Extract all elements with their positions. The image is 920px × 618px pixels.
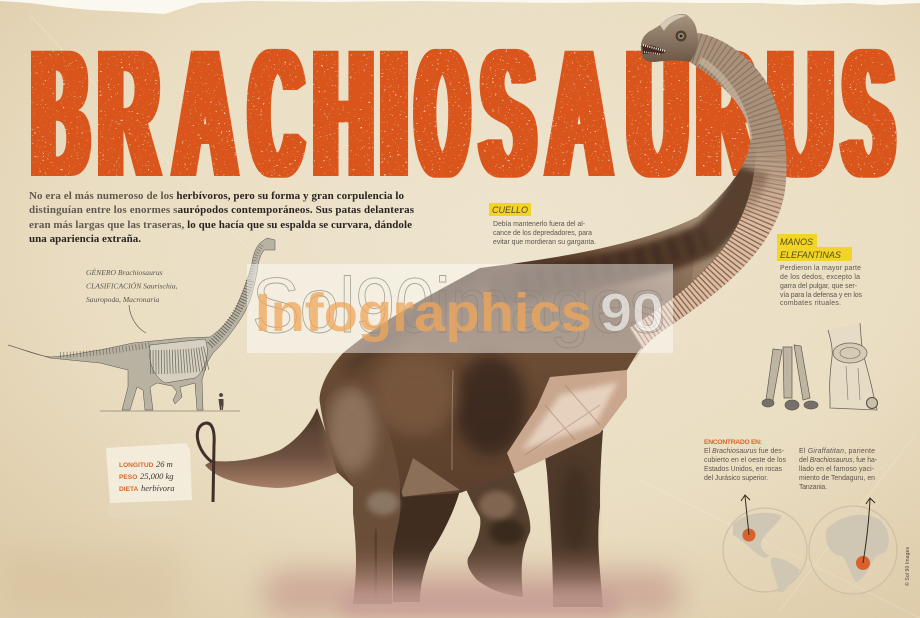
callout: cuello: Debía mantenerlo fuera del al- bbox=[493, 221, 585, 228]
callout: manos elefantinas: combates rituales. bbox=[780, 300, 841, 307]
data card: DIETA bbox=[119, 486, 139, 493]
location marker bbox=[742, 528, 756, 542]
text: encontrado en: cubierto en el oeste de los bbox=[704, 457, 787, 464]
text: giraffatitan: del Brachiosaurus, fue ha- bbox=[799, 457, 877, 464]
neck bbox=[400, 32, 786, 400]
title: A bbox=[548, 12, 610, 216]
title bbox=[33, 11, 893, 216]
text: giraffatitan: El Giraffatitan, pariente bbox=[799, 448, 875, 455]
data card: 26 m bbox=[156, 459, 173, 469]
text: encontrado en: Estados Unidos, en rocas bbox=[704, 466, 783, 473]
title: U bbox=[769, 12, 833, 215]
title: R bbox=[698, 11, 755, 215]
text: encontrado en: del Jurásico superior. bbox=[704, 475, 768, 482]
shoulder plate bbox=[507, 370, 627, 473]
text: giraffatitan: llado en el famoso yaci- bbox=[799, 466, 874, 473]
intro text: una apariencia extraña. bbox=[29, 233, 141, 245]
callout: cuello bbox=[489, 203, 596, 246]
text: encontrado en bbox=[704, 439, 787, 482]
far hind leg bbox=[393, 485, 460, 602]
sketch taxonomy note bbox=[86, 267, 178, 333]
callout: manos elefantinas: de los dedos, excepto la bbox=[780, 274, 860, 281]
main illustration: brachiosaurus bbox=[197, 32, 786, 607]
torso bbox=[320, 217, 697, 497]
intro text: distinguían entre los enormes saurópodos contemporáneos. Sus patas delanteras bbox=[29, 204, 415, 216]
credit: © Sol 90 Images bbox=[904, 546, 911, 586]
title: H bbox=[315, 11, 372, 215]
watermark: Sol90images bbox=[252, 261, 665, 349]
sketch taxonomy note: Sauropoda, Macronaria bbox=[86, 295, 159, 304]
title: S bbox=[844, 13, 893, 215]
callout: cuello: evitar que mordieran su garganta. bbox=[493, 239, 596, 246]
callout: manos elefantinas: vía para la defensa y en los bbox=[780, 292, 863, 299]
text: encontrado en: El Brachiosaurus fue des- bbox=[704, 448, 784, 455]
watermark: Infographics bbox=[255, 283, 592, 343]
text: giraffatitan: miento de Tendaguru, en bbox=[799, 475, 875, 482]
data card: PESO bbox=[119, 474, 137, 481]
intro text: No era el más numeroso de los herbívoros, pero su forma y gran corpulencia lo bbox=[29, 190, 404, 202]
sketch: hand front view bbox=[828, 323, 878, 410]
title: C bbox=[251, 12, 302, 216]
title: I bbox=[380, 12, 408, 215]
title: S bbox=[482, 11, 534, 215]
text: giraffatitan: Tanzania. bbox=[799, 484, 827, 491]
intro text: eran más largas que las traseras, lo que hacía que su espalda se curvara, dándole bbox=[29, 219, 412, 231]
ground dust bbox=[262, 570, 682, 617]
sketch taxonomy note: GÉNERO Brachiosaurus bbox=[86, 267, 163, 277]
torn top edge bbox=[0, 0, 920, 14]
title: R bbox=[100, 12, 158, 215]
callout: manos elefantinas: garra del pulgar, que ser- bbox=[780, 283, 857, 290]
callout: manos elefantinas: MANOS bbox=[780, 237, 813, 247]
knee bbox=[367, 491, 399, 515]
human scale figure bbox=[218, 393, 224, 410]
title: U bbox=[628, 11, 687, 215]
intro text bbox=[29, 190, 415, 245]
callout: cuello: cance de los depredadores, para bbox=[493, 230, 592, 237]
title: O bbox=[417, 11, 467, 215]
near front leg bbox=[543, 430, 603, 607]
arrow bbox=[741, 495, 750, 535]
near hind leg bbox=[325, 386, 400, 604]
tail bbox=[205, 408, 340, 488]
callout: manos elefantinas: Perdieron la mayor parte bbox=[780, 265, 861, 272]
sketch taxonomy note: CLASIFICACIÓN Saurischia, bbox=[86, 280, 178, 290]
callout: cuello: CUELLO bbox=[492, 205, 528, 215]
location marker bbox=[856, 556, 870, 570]
sketch: hand bones bbox=[762, 345, 818, 410]
data card bbox=[106, 443, 203, 518]
title: B bbox=[33, 12, 88, 215]
arrow bbox=[863, 498, 875, 563]
globe: africa location bbox=[809, 498, 897, 594]
middle front leg bbox=[458, 460, 530, 597]
watermark: 90 bbox=[600, 283, 664, 343]
data card: 25,000 kg bbox=[140, 471, 174, 481]
sketch: small brachiosaurus with human scale bbox=[8, 238, 275, 411]
text: encontrado en: ENCONTRADO EN: bbox=[704, 439, 762, 446]
globe: north america location bbox=[723, 495, 807, 592]
torso shading bbox=[345, 268, 526, 497]
callout: manos elefantinas bbox=[777, 234, 863, 307]
title: A bbox=[175, 11, 235, 215]
data card: LONGITUD bbox=[119, 462, 154, 469]
dinosaur head bbox=[641, 14, 698, 62]
callout: manos elefantinas: ELEFANTINAS bbox=[780, 250, 841, 260]
text: giraffatitan bbox=[799, 448, 877, 491]
data card: herbívora bbox=[141, 483, 175, 493]
tail tip bbox=[197, 423, 214, 502]
